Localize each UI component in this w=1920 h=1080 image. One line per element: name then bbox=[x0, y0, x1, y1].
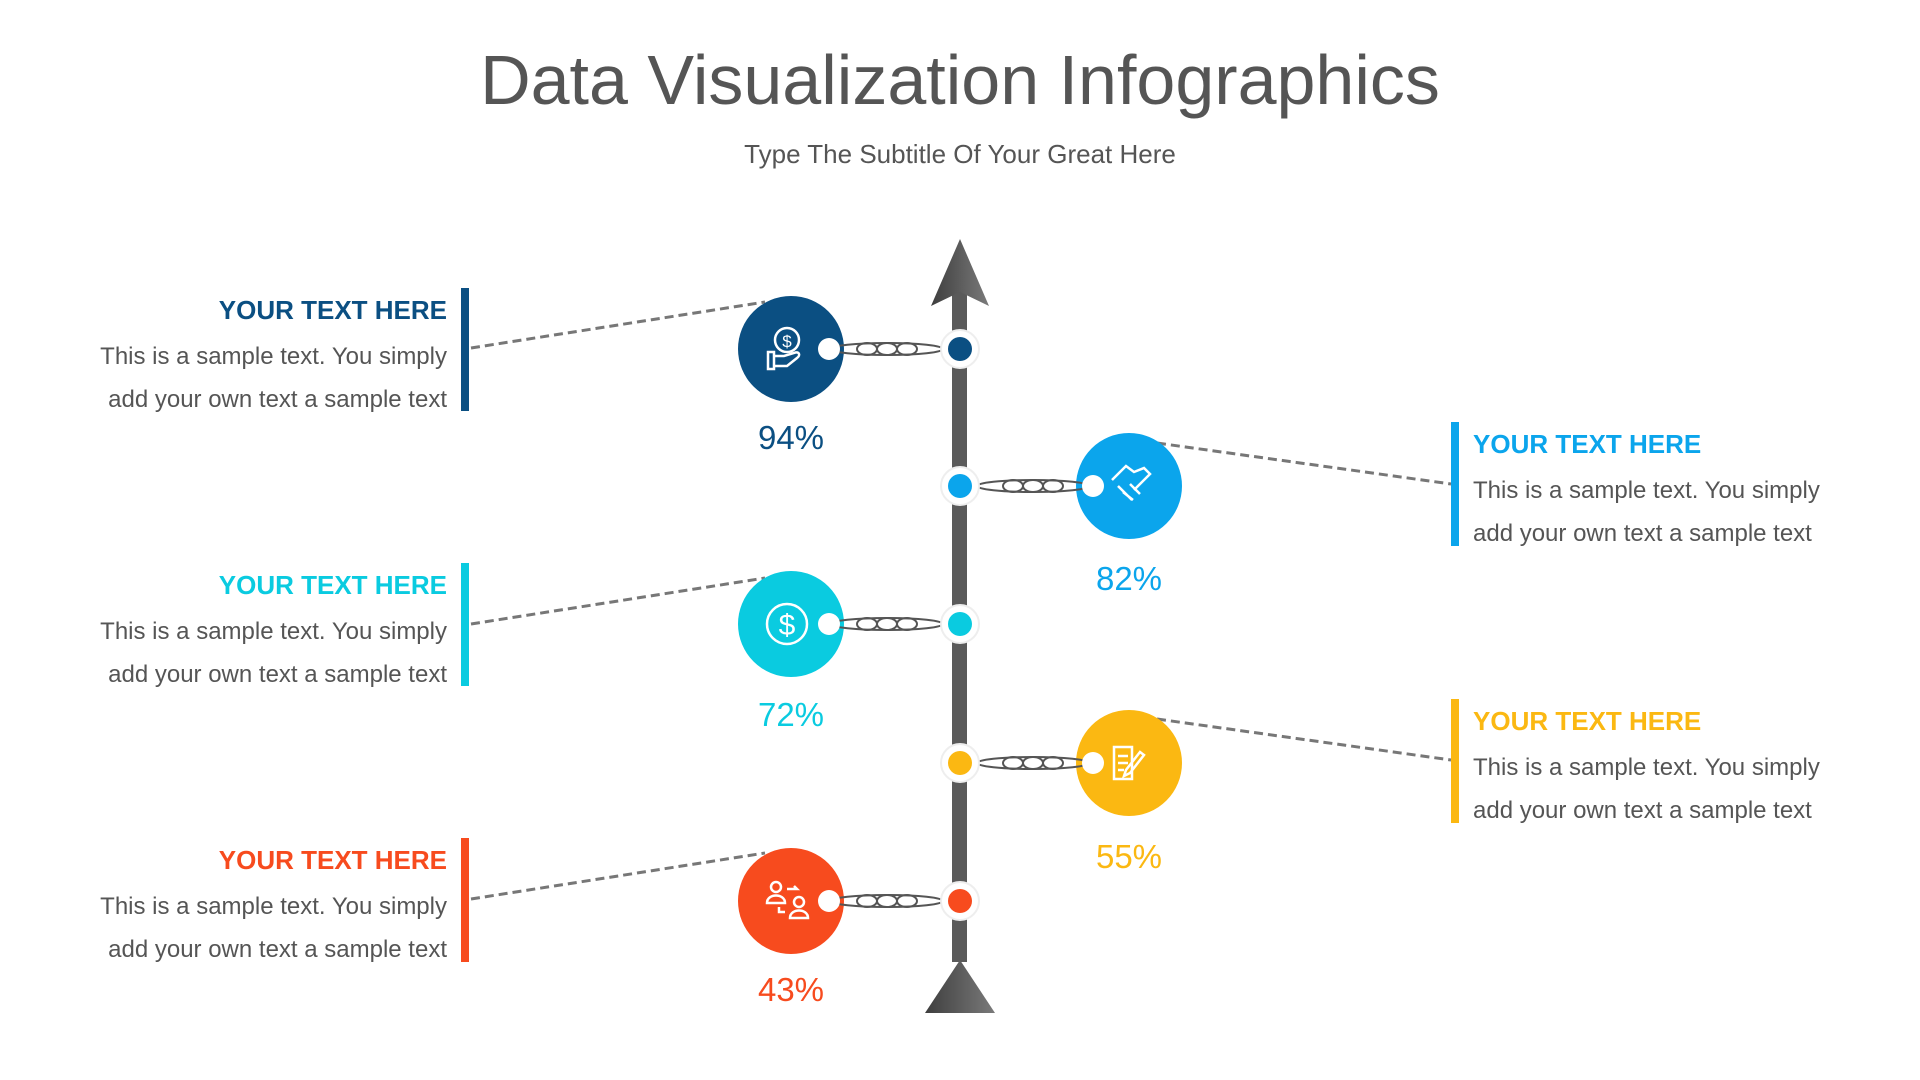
item 2: 82%: 82% bbox=[1096, 560, 1162, 597]
text block 5 (left): add your own text a sample text bbox=[108, 936, 447, 963]
text block 3 (left): This is a sample text. You simply bbox=[100, 618, 447, 645]
axis arrow bbox=[925, 239, 995, 1013]
text block 3 (left): add your own text a sample text bbox=[108, 661, 447, 688]
item 1: 94% bbox=[738, 296, 979, 456]
text block 2 (right): YOUR TEXT HERE bbox=[1473, 429, 1701, 459]
item 1: 94%: 94% bbox=[758, 419, 824, 456]
icon: handshake bbox=[1112, 466, 1150, 500]
icon: people exchange bbox=[767, 882, 808, 918]
icon: hand with coin bbox=[768, 328, 799, 369]
title: Data Visualization Infographics bbox=[480, 41, 1440, 119]
text block 1 (left) bbox=[100, 288, 469, 413]
text block 5 (left) bbox=[100, 838, 469, 963]
text block 4 (right): YOUR TEXT HERE bbox=[1473, 706, 1701, 736]
icon: hand with coin: $ bbox=[782, 332, 792, 351]
item 4: 55%: 55% bbox=[1096, 838, 1162, 875]
text block 4 (right) bbox=[1451, 699, 1820, 824]
text block 3 (left) bbox=[100, 563, 469, 688]
item 3: 72%: 72% bbox=[758, 696, 824, 733]
text block 4 (right): add your own text a sample text bbox=[1473, 797, 1812, 824]
text block 1 (left): YOUR TEXT HERE bbox=[219, 295, 447, 325]
text block 3 (left): YOUR TEXT HERE bbox=[219, 570, 447, 600]
icon: dollar coin bbox=[767, 604, 807, 644]
icon: document with pen bbox=[1114, 747, 1144, 779]
text block 5 (left): YOUR TEXT HERE bbox=[219, 845, 447, 875]
item 4: 55% bbox=[941, 710, 1182, 875]
text block 4 (right): This is a sample text. You simply bbox=[1473, 754, 1820, 781]
item 3: 72% bbox=[738, 571, 979, 733]
text block 2 (right) bbox=[1451, 422, 1820, 547]
text block 2 (right): This is a sample text. You simply bbox=[1473, 477, 1820, 504]
text block 5 (left): This is a sample text. You simply bbox=[100, 893, 447, 920]
dashed leader lines bbox=[471, 302, 1451, 899]
item 2: 82% bbox=[941, 433, 1182, 597]
icon: dollar coin: $ bbox=[779, 609, 796, 642]
text block 2 (right): add your own text a sample text bbox=[1473, 520, 1812, 547]
text block 1 (left): add your own text a sample text bbox=[108, 386, 447, 413]
item 5: 43%: 43% bbox=[758, 971, 824, 1008]
text block 1 (left): This is a sample text. You simply bbox=[100, 343, 447, 370]
subtitle: Type The Subtitle Of Your Great Here bbox=[744, 139, 1176, 169]
item 5: 43% bbox=[738, 848, 979, 1008]
